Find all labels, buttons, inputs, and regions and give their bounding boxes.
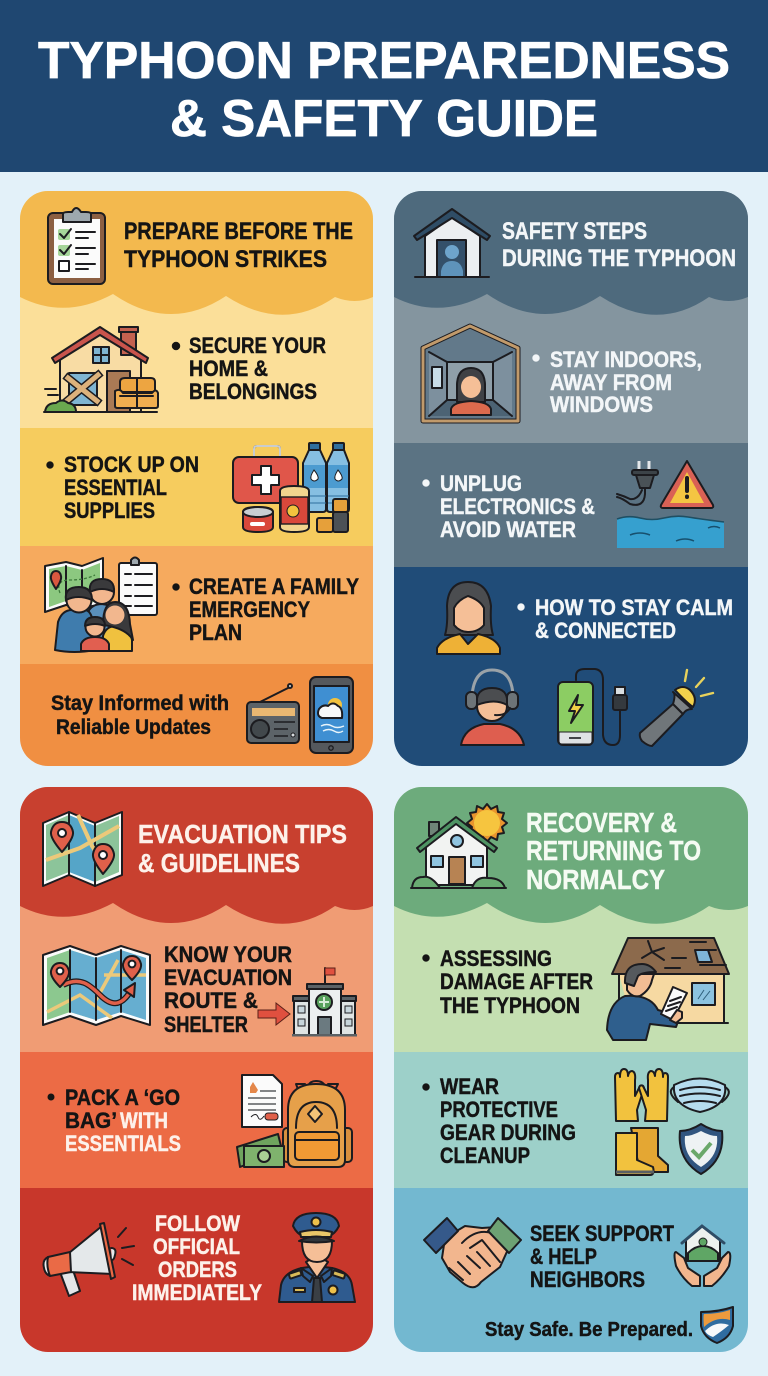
- bullet: stay calm and connected: [518, 595, 733, 643]
- bullet: go bag: BAG’: [65, 1108, 117, 1133]
- bullet: protective gear: GEAR DURING: [440, 1120, 576, 1145]
- bullet: know your route: [164, 942, 292, 1037]
- panel: evacuation tips: [20, 787, 373, 1352]
- bullet: follow orders: OFFICIAL: [153, 1234, 240, 1259]
- text: stay informed: [51, 692, 229, 739]
- bullet: secure home: [172, 333, 326, 404]
- bullet: go bag: PACK A ‘GO: [65, 1085, 180, 1110]
- panel: safety during the typhoon: [394, 191, 748, 766]
- icon: map with pins: [43, 812, 122, 886]
- heading: evacuation tips: EVACUATION TIPS: [138, 819, 347, 849]
- bullet: protective gear: [422, 1074, 576, 1168]
- bullet: protective gear: CLEANUP: [440, 1143, 530, 1168]
- icon: megaphone: [44, 1223, 134, 1296]
- bullet: seek support: & HELP: [530, 1244, 597, 1269]
- icon: calm woman: [437, 582, 500, 654]
- title: [38, 32, 730, 148]
- bullet: follow orders: FOLLOW: [155, 1211, 241, 1236]
- bullet: know your route: SHELTER: [164, 1012, 248, 1037]
- bullet: secure home: HOME &: [189, 356, 268, 381]
- bullet: assessing damage: DAMAGE AFTER: [440, 969, 593, 994]
- bullet: stock supplies: SUPPLIES: [64, 498, 155, 523]
- heading: safety steps: SAFETY STEPS: [502, 218, 647, 245]
- title: TYPHOON PREPAREDNESS: [38, 32, 730, 90]
- bullet: go bag: [48, 1085, 181, 1156]
- bullet: stay indoors: [532, 347, 702, 417]
- bullet: family plan: EMERGENCY: [189, 597, 310, 622]
- bullet: know your route: EVACUATION: [164, 965, 292, 990]
- bullet: stay indoors: WINDOWS: [550, 392, 653, 417]
- bullet: stay calm and connected: & CONNECTED: [535, 618, 676, 643]
- icon: radio: [247, 684, 299, 743]
- bullet: stay indoors: STAY INDOORS,: [550, 347, 702, 372]
- icon: hands holding house: [674, 1226, 730, 1286]
- title banner: [0, 0, 768, 172]
- footer: stay safe: Stay Safe. Be Prepared.: [485, 1319, 693, 1341]
- bullet: stay calm and connected: HOW TO STAY CALM: [535, 595, 733, 620]
- icon: police officer: [279, 1213, 355, 1302]
- bullet: family plan: CREATE A FAMILY: [189, 574, 359, 599]
- text: stay informed: Reliable Updates: [56, 716, 211, 739]
- bullet: know your route: ROUTE &: [164, 988, 258, 1013]
- title: & SAFETY GUIDE: [170, 90, 598, 148]
- bullet: unplug electronics: AVOID WATER: [440, 517, 576, 542]
- heading: safety steps: [502, 218, 736, 272]
- bullet: follow orders: ORDERS: [158, 1257, 237, 1282]
- bullet: go bag: ESSENTIALS: [65, 1131, 181, 1156]
- bullet: family plan: PLAN: [189, 620, 242, 645]
- icon: house with sun: [411, 804, 507, 888]
- text: stay informed: Stay Informed with: [51, 692, 229, 715]
- arrow to shelter: [258, 1003, 290, 1025]
- icon: smartphone with weather: [310, 677, 353, 753]
- icon: handshake: [424, 1218, 521, 1287]
- bullet: follow orders: IMMEDIATELY: [132, 1280, 262, 1305]
- bullet: protective gear: WEAR: [440, 1074, 499, 1099]
- panel: recovery: [394, 787, 748, 1352]
- bullet: stock supplies: ESSENTIAL: [64, 475, 167, 500]
- bullet: stock supplies: STOCK UP ON: [64, 452, 199, 477]
- icon: family with map and checklist: [45, 558, 157, 652]
- bullet: assessing damage: THE TYPHOON: [440, 993, 580, 1018]
- heading: recovery: [526, 807, 701, 895]
- bullet: seek support: NEIGHBORS: [530, 1267, 645, 1292]
- bullet: stay indoors: AWAY FROM: [550, 370, 672, 395]
- icon: shelter building: [292, 968, 357, 1036]
- bullet: seek support: SEEK SUPPORT: [530, 1221, 674, 1246]
- bullet: protective gear: PROTECTIVE: [440, 1097, 558, 1122]
- icon: flashlight: [640, 670, 713, 746]
- icon: gloves, mask, boots and shield: [615, 1069, 729, 1175]
- bullet: go bag: WITH: [120, 1108, 168, 1133]
- bullet: secure home: BELONGINGS: [189, 379, 317, 404]
- bullet: assessing damage: [422, 946, 593, 1018]
- icon: evacuation route map: [43, 946, 150, 1025]
- heading: recovery: RETURNING TO: [526, 835, 701, 866]
- icon: person with headset: [461, 670, 524, 745]
- icon: boarded house with sofa: [44, 327, 158, 412]
- panel: prepare before the typhoon: [20, 191, 373, 766]
- bullet: secure home: SECURE YOUR: [189, 333, 326, 358]
- icon: wave shield logo: [701, 1307, 733, 1343]
- bullet: family plan: [172, 574, 359, 645]
- bullet: seek support: [530, 1221, 674, 1292]
- icon: first aid kit, cans and water: [233, 443, 349, 532]
- bullet: know your route: KNOW YOUR: [164, 942, 292, 967]
- heading: prepare: [124, 218, 353, 273]
- icon: person in room away from windows: [423, 326, 518, 421]
- bullet: stock supplies: [46, 452, 199, 523]
- heading: evacuation tips: [138, 819, 347, 878]
- icon: power bank: [558, 669, 627, 746]
- icon: documents, cash and backpack: [237, 1075, 352, 1167]
- heading: recovery: RECOVERY &: [526, 807, 677, 838]
- bullet: assessing damage: ASSESSING: [440, 946, 552, 971]
- icon: plug, warning sign and water: [617, 461, 724, 548]
- icon: house with person: [414, 209, 490, 277]
- bullet: unplug electronics: UNPLUG: [440, 471, 522, 496]
- heading: prepare: PREPARE BEFORE THE: [124, 218, 353, 245]
- bullet: unplug electronics: ELECTRONICS &: [440, 494, 595, 519]
- heading: evacuation tips: & GUIDELINES: [138, 848, 300, 878]
- heading: recovery: NORMALCY: [526, 864, 665, 895]
- bullet: unplug electronics: [422, 471, 595, 542]
- icon: person assessing damaged house: [607, 938, 729, 1040]
- bullet: follow orders: [132, 1211, 262, 1305]
- heading: prepare: TYPHOON STRIKES: [124, 246, 327, 273]
- icon: clipboard checklist: [48, 208, 105, 284]
